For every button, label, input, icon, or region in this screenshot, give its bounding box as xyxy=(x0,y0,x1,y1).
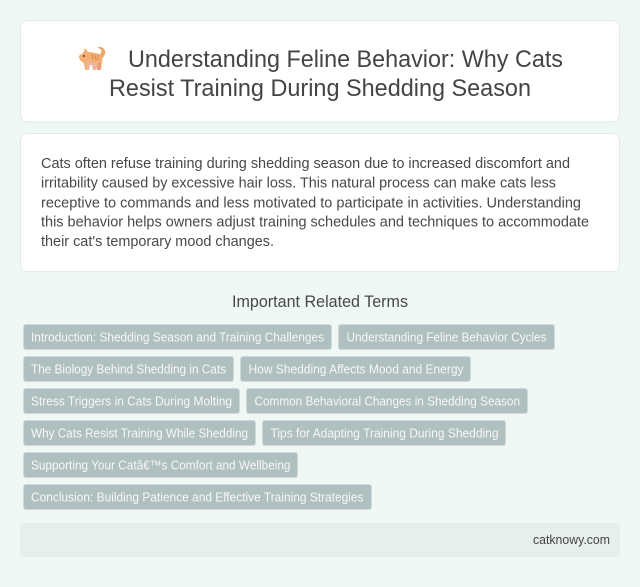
tag: Conclusion: Building Patience and Effective Training Strategies xyxy=(31,490,364,504)
description text: irritability caused by excessive hair loss. This natural process can make cats less xyxy=(41,176,556,192)
tag xyxy=(338,324,554,350)
footer text: catknowy.com xyxy=(533,532,610,547)
tag: Supporting Your Catâ€™s Comfort and Wellbeing xyxy=(31,458,290,472)
description text: this behavior helps owners adjust training schedules and techniques to accommodate xyxy=(41,214,589,230)
tag xyxy=(24,484,372,510)
tag xyxy=(246,388,528,414)
tag xyxy=(24,388,240,414)
description text: their cat's temporary mood changes. xyxy=(41,234,274,250)
tag xyxy=(24,452,298,478)
footer bar xyxy=(20,523,620,557)
heading: related terms: Important Related Terms xyxy=(232,293,408,311)
tag: Tips for Adapting Training During Shedding xyxy=(270,426,498,440)
title text: Resist Training During Shedding Season xyxy=(109,75,531,102)
tag: The Biology Behind Shedding in Cats xyxy=(31,362,226,376)
panel: title card xyxy=(20,20,620,122)
tag: Introduction: Shedding Season and Training Challenges xyxy=(31,330,324,344)
tag: Common Behavioral Changes in Shedding Season xyxy=(254,394,520,408)
tag xyxy=(262,420,506,446)
panel: description card xyxy=(20,134,620,272)
tag xyxy=(240,356,470,382)
tag xyxy=(24,324,332,350)
tag: Stress Triggers in Cats During Molting xyxy=(31,394,232,408)
description text xyxy=(41,156,589,250)
title text: Understanding Feline Behavior: Why Cats xyxy=(128,46,563,73)
tag: Why Cats Resist Training While Shedding xyxy=(31,426,248,440)
tag: How Shedding Affects Mood and Energy xyxy=(248,362,464,376)
tag list xyxy=(24,324,554,510)
icon: cat xyxy=(79,47,105,70)
tag xyxy=(24,356,234,382)
title text xyxy=(109,46,563,102)
description text: Cats often refuse training during shedding season due to increased discomfort and xyxy=(41,156,570,172)
tag xyxy=(24,420,256,446)
description text: receptive to commands and less motivated to participate in activities. Understanding xyxy=(41,196,581,212)
tag: Understanding Feline Behavior Cycles xyxy=(346,330,546,344)
